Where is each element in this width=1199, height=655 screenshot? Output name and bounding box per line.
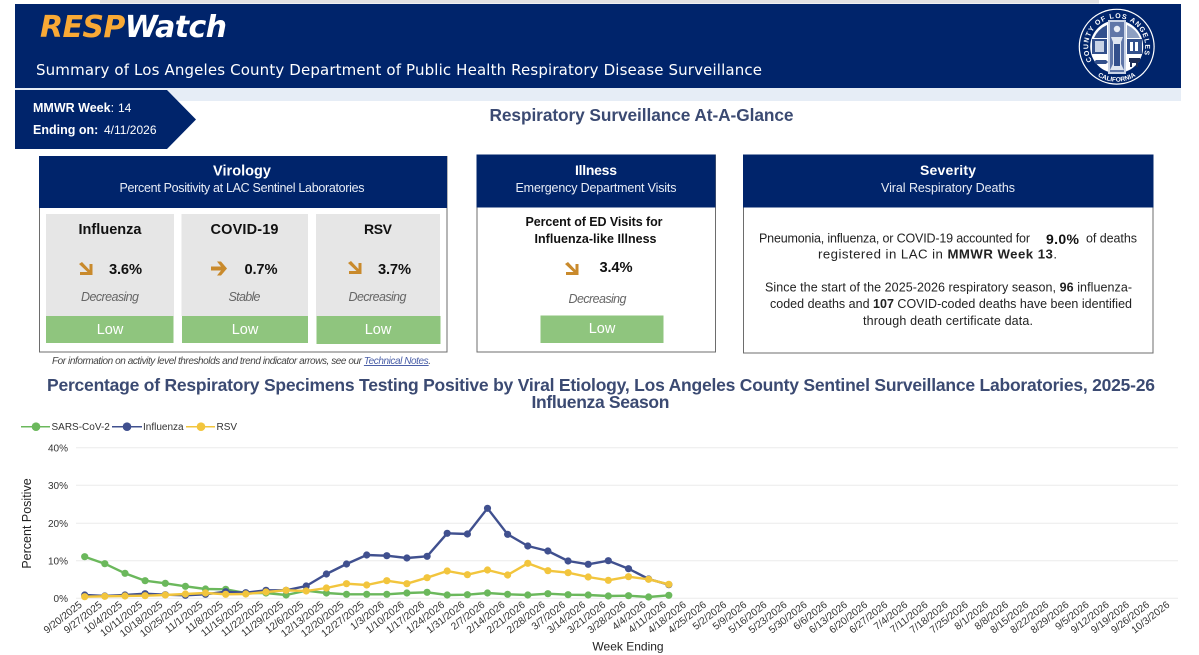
- x axis date labels: 9/27/2025: [62, 599, 105, 636]
- x axis date labels: 10/18/2025: [118, 599, 165, 640]
- x axis date labels: 12/13/2025: [279, 599, 327, 640]
- icon: Los Angeles County seal: CALIFORNIA: [1098, 73, 1136, 82]
- x axis date labels: 8/29/2026: [1029, 599, 1072, 636]
- panel: virology: [39, 156, 447, 352]
- x axis date labels: 2/28/2026: [505, 599, 548, 636]
- severity season deaths text: Since the start of the 2025-2026 respiratory season, 96 influenza-: [765, 280, 1132, 294]
- card: COVID-19: Stable: [228, 290, 261, 304]
- x axis date labels: 10/3/2026: [1130, 599, 1172, 636]
- x axis date labels: 12/6/2025: [264, 599, 306, 636]
- severity subheading: Viral Respiratory Deaths: [881, 181, 1015, 195]
- severity percent of deaths text: 9.0%: [1046, 231, 1080, 247]
- y axis labels: 30%: [48, 481, 68, 492]
- week ending date: Ending on:: [33, 123, 98, 137]
- card: influenza: Low: [97, 322, 124, 338]
- panel: illness: [476, 154, 716, 352]
- x axis date labels: 3/28/2026: [586, 599, 629, 636]
- y axis labels: 40%: [48, 444, 68, 454]
- x axis date labels: 3/7/2026: [530, 599, 568, 633]
- x axis title: Week Ending: [592, 640, 664, 654]
- x axis date labels: 4/4/2026: [610, 599, 649, 633]
- x axis date labels: 7/18/2026: [908, 599, 951, 636]
- card: RSV: [316, 214, 440, 344]
- x axis date labels: 11/15/2025: [199, 599, 246, 639]
- card: influenza: 3.6%: [109, 262, 142, 278]
- x axis date labels: 5/23/2026: [747, 599, 790, 636]
- x axis date labels: 11/29/2025: [240, 599, 286, 639]
- x axis date labels: 5/30/2026: [767, 599, 810, 636]
- illness trend: Decreasing: [568, 292, 627, 306]
- legend: SARS-CoV-2: [52, 422, 110, 433]
- x axis date labels: 11/1/2025: [163, 599, 206, 636]
- x axis date labels: 11/22/2025: [219, 599, 266, 639]
- icon: decreasing arrow: [348, 261, 362, 274]
- x axis date labels: 1/24/2026: [405, 599, 447, 636]
- week banner: [15, 90, 196, 149]
- x axis date labels: 9/5/2026: [1054, 599, 1092, 633]
- x axis date labels: 1/31/2026: [425, 599, 468, 636]
- card: influenza: Decreasing: [81, 290, 139, 304]
- x axis date labels: 9/26/2026: [1109, 599, 1152, 636]
- panel: severity: [743, 154, 1154, 353]
- logo: RESPWatch: RESPWatch: [40, 10, 227, 45]
- card: RSV: Decreasing: [348, 290, 407, 304]
- icon: Los Angeles County seal: [1078, 8, 1155, 85]
- x axis date labels: 6/6/2026: [792, 599, 830, 633]
- illness heading: Illness: [575, 162, 617, 178]
- severity percent of deaths text: [759, 231, 1137, 262]
- x axis date labels: 9/20/2025: [42, 599, 85, 636]
- x axis date labels: 10/25/2025: [138, 599, 186, 640]
- severity percent of deaths text: registered in LAC in MMWR Week 13.: [818, 246, 1057, 262]
- x axis date labels: 9/12/2026: [1069, 599, 1112, 636]
- x axis date labels: 7/11/2026: [889, 599, 931, 636]
- section heading: Respiratory Surveillance At-A-Glance: [490, 105, 794, 125]
- x axis date labels: 7/4/2026: [872, 599, 911, 633]
- x axis date labels: 12/20/2025: [299, 599, 347, 640]
- card: influenza: Influenza: [78, 222, 142, 238]
- icon: stable arrow: [211, 262, 227, 276]
- x axis date labels: 10/11/2025: [99, 599, 145, 639]
- severity season deaths text: coded deaths and 107 COVID-coded deaths have been identified: [770, 297, 1132, 311]
- virology heading: Virology: [213, 164, 271, 180]
- legend: [21, 422, 237, 433]
- severity percent of deaths text: Pneumonia, influenza, or COVID-19 accounted for: [759, 232, 1030, 246]
- severity percent of deaths text: of deaths: [1086, 232, 1137, 246]
- card: COVID-19: 0.7%: [244, 262, 278, 278]
- x axis date labels: 8/22/2026: [1009, 599, 1052, 636]
- icon: decreasing arrow: [79, 262, 92, 275]
- x axis date labels: 2/7/2026: [449, 599, 488, 633]
- technical notes footnote: For information on activity level thresholds and trend indicator arrows, see our Technical Notes.: [52, 356, 431, 367]
- x axis date labels: 6/20/2026: [828, 599, 870, 636]
- x axis date labels: 5/9/2026: [711, 599, 749, 633]
- line chart: [20, 422, 1178, 654]
- MMWR week: 14: [118, 101, 132, 115]
- x axis date labels: 5/2/2026: [691, 599, 729, 633]
- y axis labels: 10%: [48, 556, 68, 568]
- x axis date labels: 3/14/2026: [546, 599, 588, 636]
- virology subheading: Percent Positivity at LAC Sentinel Laboratories: [120, 181, 364, 195]
- icon: decreasing arrow: [565, 262, 578, 275]
- week ending date: 4/11/2026: [104, 123, 157, 137]
- y axis title: Percent Positive: [20, 478, 34, 569]
- illness subheading: Emergency Department Visits: [516, 181, 676, 195]
- MMWR week: MMWR Week:: [33, 101, 114, 115]
- illness metric title: Influenza-like Illness: [534, 232, 657, 246]
- icon: Los Angeles County seal: COUNTY OF LOS ANGELES: [1083, 13, 1150, 62]
- severity season deaths text: [765, 280, 1132, 328]
- x axis date labels: 8/15/2026: [989, 599, 1031, 636]
- header subtitle: Summary of Los Angeles County Department of Public Health Respiratory Disease Surveillance: [36, 61, 762, 79]
- x axis date labels: [42, 599, 1172, 640]
- x axis date labels: 1/17/2026: [384, 599, 427, 636]
- card: RSV: Low: [365, 322, 392, 338]
- y axis labels: 0%: [54, 594, 68, 605]
- x axis date labels: 6/27/2026: [848, 599, 890, 636]
- x axis date labels: 5/16/2026: [727, 599, 770, 636]
- x axis date labels: 10/4/2025: [82, 599, 125, 636]
- x axis date labels: 8/8/2026: [973, 599, 1011, 633]
- series: SARS-CoV-2: [85, 557, 669, 597]
- card: influenza: [46, 214, 174, 343]
- x axis date labels: 8/1/2026: [953, 599, 991, 633]
- x axis date labels: 4/25/2026: [666, 599, 709, 636]
- x axis date labels: 4/11/2026: [627, 599, 669, 636]
- x axis date labels: 2/14/2026: [465, 599, 508, 636]
- x axis date labels: 6/13/2026: [807, 599, 850, 636]
- x axis date labels: 7/25/2026: [928, 599, 971, 636]
- header banner: [15, 4, 1181, 101]
- illness value: 3.4%: [600, 260, 632, 276]
- legend: RSV: [216, 422, 237, 433]
- severity season deaths text: through death certificate data.: [863, 314, 1033, 328]
- y axis labels: 20%: [48, 519, 68, 530]
- card: COVID-19: [182, 214, 308, 343]
- y axis labels: [48, 444, 68, 605]
- legend: Influenza: [143, 422, 184, 433]
- x axis date labels: 2/21/2026: [485, 599, 528, 636]
- chart title: Influenza Season: [532, 392, 670, 412]
- x axis date labels: 1/10/2026: [364, 599, 407, 636]
- x axis date labels: 1/3/2026: [349, 599, 387, 633]
- illness level: Low: [589, 321, 616, 337]
- x axis date labels: 11/8/2025: [184, 599, 226, 636]
- card: COVID-19: COVID-19: [210, 222, 278, 238]
- card: RSV: 3.7%: [378, 262, 411, 278]
- series: RSV: [85, 563, 669, 597]
- x axis date labels: 12/27/2025: [320, 599, 367, 640]
- card: COVID-19: Low: [232, 322, 259, 338]
- card: RSV: RSV: [364, 221, 393, 237]
- x axis date labels: 4/18/2026: [646, 599, 689, 636]
- illness level: [540, 316, 664, 343]
- x axis date labels: 3/21/2026: [566, 599, 608, 636]
- x axis date labels: 9/19/2026: [1089, 599, 1132, 636]
- illness metric title: Percent of ED Visits for: [526, 215, 663, 229]
- chart title: Percentage of Respiratory Specimens Testing Positive by Viral Etiology, Los Angeles County Sentinel Surveillance Laboratories, 2025-26: [47, 375, 1155, 395]
- severity heading: Severity: [920, 162, 976, 178]
- series: Influenza: [85, 508, 669, 596]
